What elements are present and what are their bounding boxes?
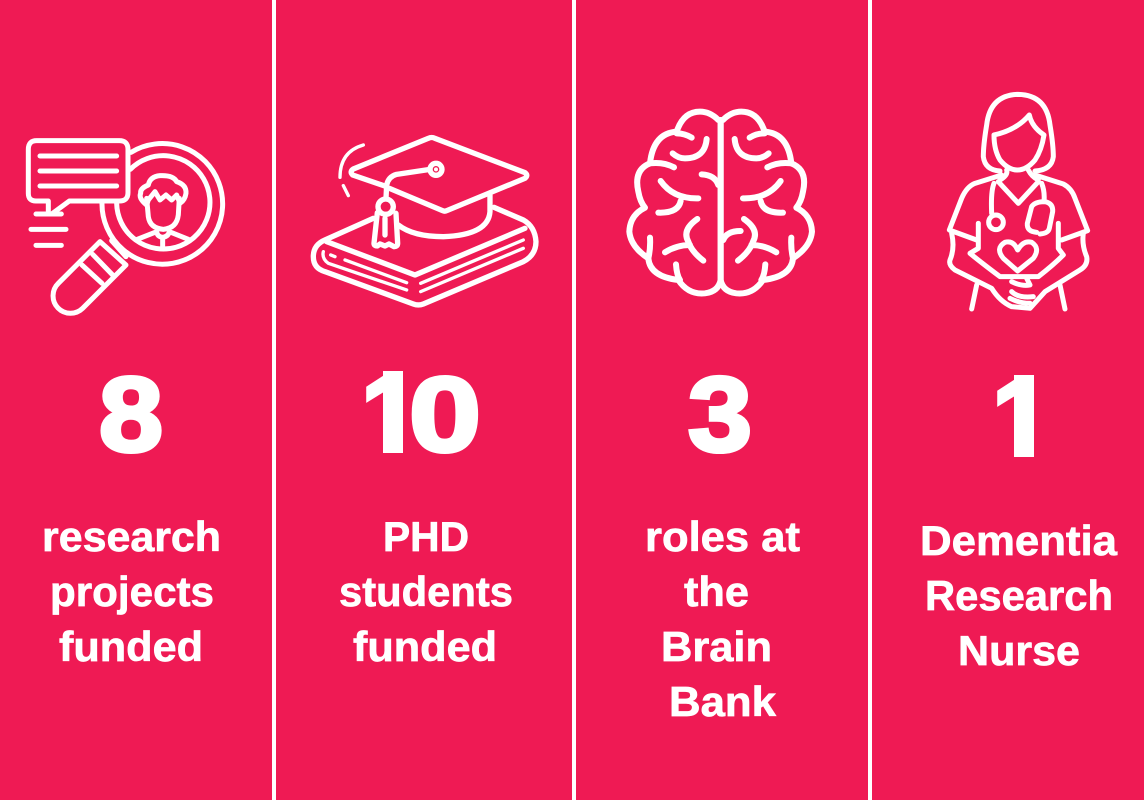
number: 10: [355, 354, 481, 474]
label: Dementia Research Nurse: Dementia: [920, 517, 1118, 564]
label: roles at the Brain Bank: Bank: [669, 678, 777, 725]
label: research projects funded: funded: [59, 623, 203, 670]
label: research projects funded: projects: [50, 568, 214, 615]
label: PHD students funded: PHD: [383, 513, 469, 560]
label: PHD students funded: funded: [353, 623, 497, 670]
number: 10: 1: [361, 354, 420, 472]
number: 8: 8: [99, 356, 163, 474]
label: research projects funded: research: [42, 513, 221, 560]
icon: magnifier with speech bubble and person: [28, 141, 223, 313]
panel: Dementia Research Nurse: [920, 94, 1118, 674]
panel: research projects: [28, 141, 223, 670]
number: 10: 0: [409, 356, 481, 474]
label: Dementia Research Nurse: [920, 517, 1118, 674]
panel: Brain Bank roles: [629, 112, 812, 725]
label: PHD students funded: [339, 513, 513, 670]
number: 1: 1: [992, 358, 1051, 476]
label: research projects funded: [42, 513, 221, 670]
panel: PHD students: [313, 137, 536, 670]
label: roles at the Brain Bank: [645, 513, 800, 725]
icon: brain: [629, 112, 812, 293]
label: PHD students funded: students: [339, 568, 513, 615]
label: roles at the Brain Bank: Brain: [661, 623, 772, 670]
label: roles at the Brain Bank: roles at: [645, 513, 800, 560]
number: 3: 3: [688, 356, 752, 474]
label: Dementia Research Nurse: Nurse: [958, 627, 1080, 674]
label: Dementia Research Nurse: Research: [925, 572, 1113, 619]
icon: nurse with heart: [949, 94, 1088, 309]
icon: graduation cap on book: [313, 137, 536, 305]
label: roles at the Brain Bank: the: [684, 568, 749, 615]
